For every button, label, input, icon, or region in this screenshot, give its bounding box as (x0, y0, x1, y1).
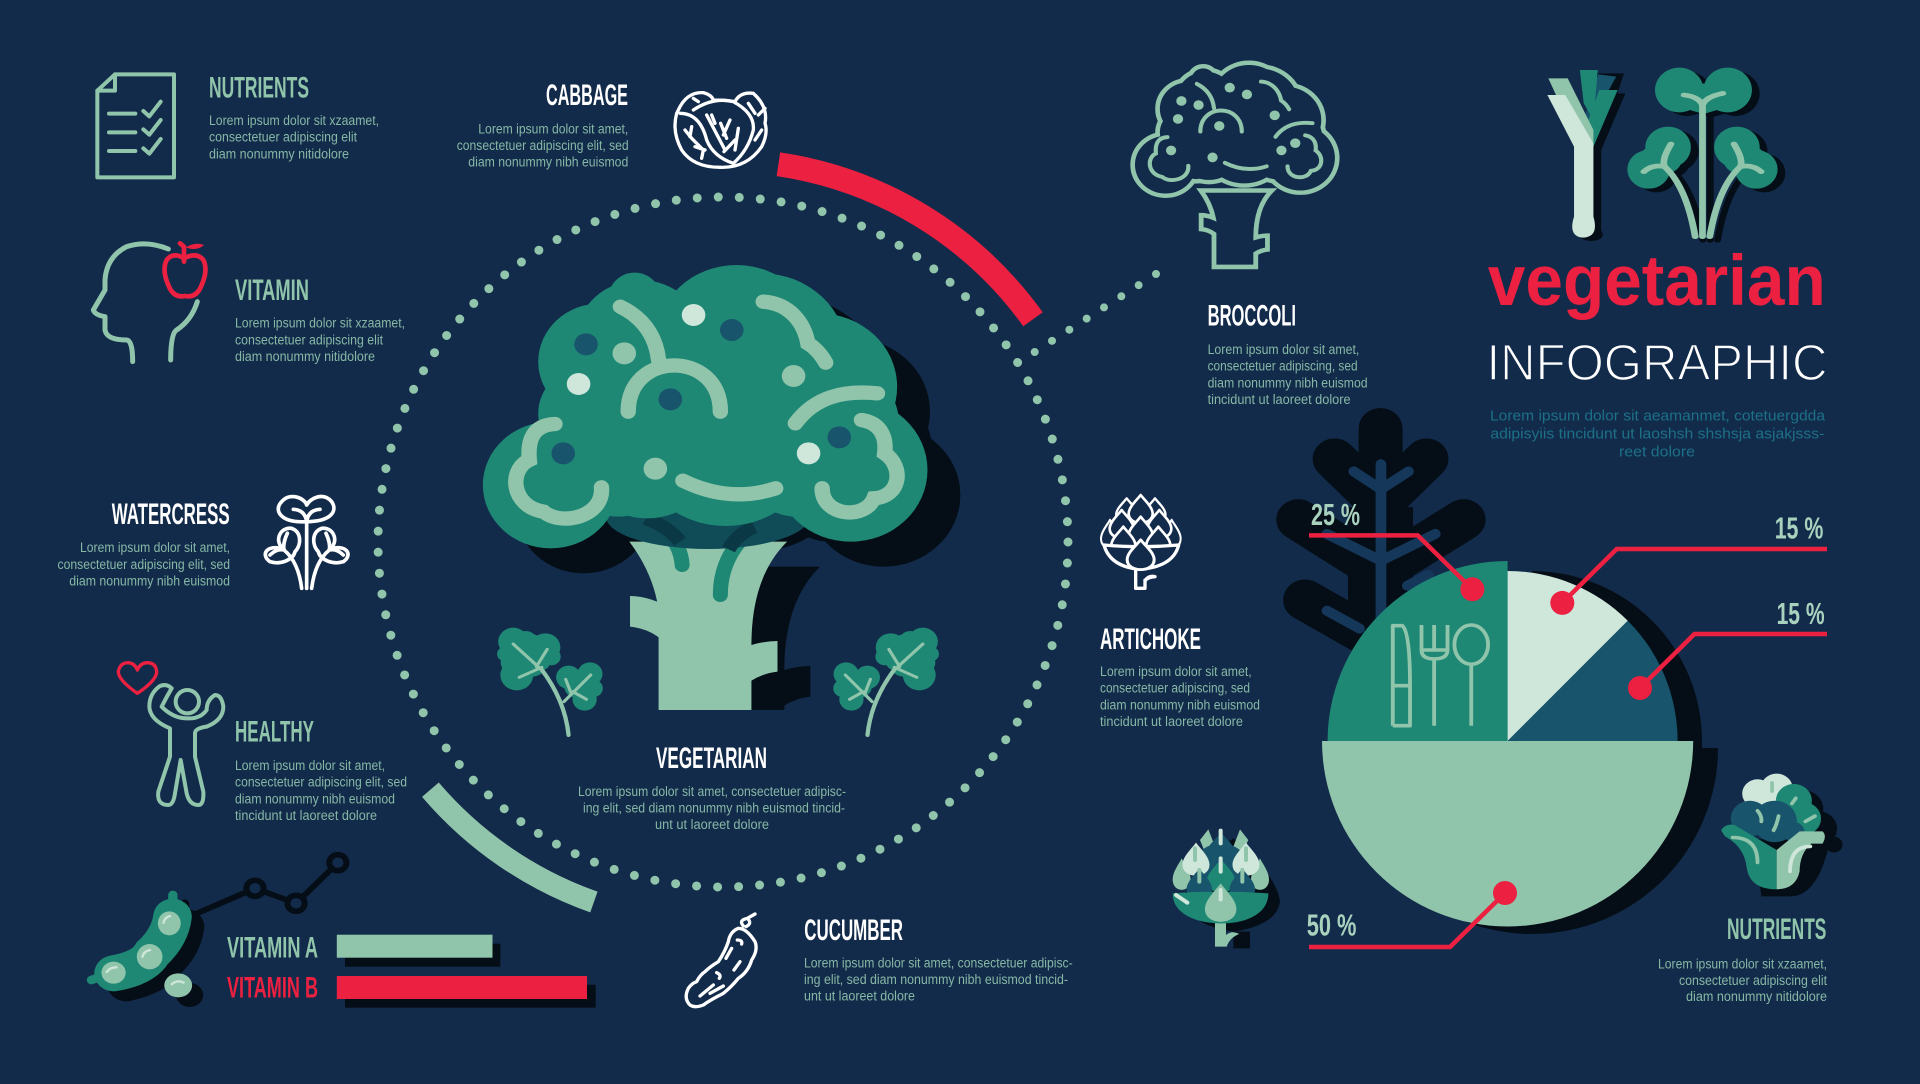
text: artichoke: diam nonummy nibh euismod (1100, 698, 1260, 713)
intro paragraph: Lorem ipsum dolor sit aeamanmet, cotetuergdda (1490, 408, 1826, 424)
black leaf behind pie (1298, 429, 1464, 643)
icon: healthy figure with heart (118, 663, 223, 805)
text: healthy: diam nonummy nibh euismod (235, 791, 395, 806)
text: cucumber (804, 956, 1073, 1004)
icon: colored watercress (1627, 68, 1785, 240)
text: watercress: diam nonummy nibh euismod (69, 574, 230, 588)
title: vegetarian (1488, 242, 1826, 321)
intro paragraph: adipisyiis tincidunt ut laoshsh shshsja asjakjsss- (1490, 426, 1824, 442)
text: vitamin: Lorem ipsum dolor sit xzaamet, (235, 316, 405, 331)
text: broccoli: Lorem ipsum dolor sit amet, (1208, 342, 1359, 357)
callout: 50 percent: 50 % (1307, 908, 1356, 943)
intro paragraph: reet dolore (1619, 444, 1695, 460)
callout: 15 percent lower: 15 % (1777, 596, 1825, 631)
text: vitamin: consectetuer adipiscing elit (235, 332, 383, 347)
heading: watercress: WATERCRESS (112, 498, 230, 531)
text: healthy: tincidunt ut laoreet dolore (235, 808, 377, 823)
icon: head with apple (93, 243, 205, 362)
text: broccoli: tincidunt ut laoreet dolore (1208, 392, 1351, 407)
text: cucumber: unt ut laoreet dolore (804, 988, 915, 1004)
heading: artichoke: ARTICHOKE (1100, 623, 1201, 656)
text: artichoke (1100, 664, 1260, 729)
intro paragraph (1490, 408, 1826, 460)
dotted circle (378, 197, 1068, 887)
text: cucumber: ing elit, sed diam nonummy nibh euismod tincid- (804, 972, 1068, 987)
icon: checklist (97, 74, 174, 177)
icon: colored artichoke (1173, 829, 1280, 948)
callout: 50 percent (1307, 881, 1517, 947)
subtitle: INFOGRAPHIC (1486, 334, 1828, 391)
heading: nutrients: NUTRIENTS (209, 71, 309, 104)
parsley right (833, 628, 939, 735)
heading: cabbage: CABBAGE (546, 79, 628, 112)
text: vitamin: diam nonummy nitidolore (235, 349, 375, 364)
text: cabbage: consectetuer adipiscing elit, sed (457, 138, 629, 153)
bar: vitamin b (337, 976, 596, 1008)
chart line (193, 855, 346, 915)
text: vegetarian (578, 784, 846, 832)
line chart and bean pod (91, 855, 346, 1007)
text: nutrients right: diam nonummy nitidolore (1686, 989, 1827, 1004)
callout: 25 percent: 25 % (1311, 497, 1360, 532)
text: vegetarian: Lorem ipsum dolor sit amet, consectetuer adipisc- (578, 784, 846, 799)
text: nutrients: Lorem ipsum dolor sit xzaamet, (209, 113, 379, 128)
text: artichoke: Lorem ipsum dolor sit amet, (1100, 664, 1252, 679)
text: healthy: consectetuer adipiscing elit, sed (235, 775, 407, 790)
green arc (430, 790, 594, 902)
text: watercress: consectetuer adipiscing elit, sed (58, 557, 230, 572)
callout: 15 percent top: 15 % (1775, 511, 1823, 546)
icon: cabbage outline (675, 93, 766, 167)
lettuce shadow (1754, 790, 1842, 896)
pie chart (1322, 561, 1718, 934)
text: vitamin (235, 316, 405, 364)
icon: cutlery (1393, 625, 1488, 726)
slice 15% dark (1508, 621, 1678, 741)
icon: watercress outline (265, 497, 348, 588)
text: cabbage: diam nonummy nibh euismod (468, 155, 628, 170)
text: broccoli: consectetuer adipiscing, sed (1208, 359, 1358, 374)
text: vegetarian: unt ut laoreet dolore (655, 817, 769, 832)
heading: vegetarian: VEGETARIAN (656, 742, 767, 775)
text: nutrients right (1658, 957, 1827, 1004)
red arc (778, 164, 1033, 319)
text: nutrients right: consectetuer adipiscing elit (1679, 973, 1827, 988)
pod shadow (126, 903, 203, 1007)
parsley left (497, 628, 603, 735)
label: vitamin a: VITAMIN A (227, 932, 318, 965)
peas (101, 911, 192, 997)
central broccoli illustration (483, 265, 960, 735)
text: broccoli (1208, 342, 1368, 407)
callout: 25 percent (1309, 497, 1484, 601)
broccoli body (483, 265, 927, 710)
text: cabbage (457, 121, 629, 170)
icon: colored leek (1547, 70, 1625, 241)
text: watercress (58, 540, 230, 588)
broccoli shadow (526, 306, 960, 710)
icon: cucumber outline (686, 914, 756, 1007)
heading: broccoli: BROCCOLI (1208, 300, 1296, 333)
slice 25% (1328, 561, 1508, 741)
text: artichoke: tincidunt ut laoreet dolore (1100, 714, 1243, 729)
text: cabbage: Lorem ipsum dolor sit amet, (478, 121, 628, 136)
text: broccoli: diam nonummy nibh euismod (1208, 375, 1368, 390)
dotted connector to broccoli (1035, 274, 1156, 352)
label: vitamin b: VITAMIN B (227, 971, 318, 1004)
text: nutrients (209, 113, 379, 161)
text: nutrients right: Lorem ipsum dolor sit xzaamet, (1658, 957, 1827, 972)
heading: vitamin: VITAMIN (235, 274, 309, 307)
heading: cucumber: CUCUMBER (804, 914, 903, 947)
text: artichoke: consectetuer adipiscing, sed (1100, 681, 1250, 696)
pod (91, 895, 173, 980)
icon: artichoke outline (1101, 495, 1181, 588)
heading: healthy: HEALTHY (235, 716, 314, 749)
icon: colored lettuce (1721, 774, 1842, 896)
bar: vitamin a (337, 935, 500, 967)
slice 15% pale (1508, 571, 1628, 741)
heading: nutrients right: NUTRIENTS (1727, 913, 1826, 946)
text: watercress: Lorem ipsum dolor sit amet, (80, 540, 230, 555)
text: healthy (235, 758, 407, 823)
text: nutrients: consectetuer adipiscing elit (209, 130, 357, 145)
slice 50% (1322, 741, 1693, 926)
text: cucumber: Lorem ipsum dolor sit amet, consectetuer adipisc- (804, 956, 1073, 971)
icon: broccoli outline (1135, 65, 1335, 267)
callout: 15 percent lower (1628, 596, 1827, 700)
callout: 15 percent top (1550, 511, 1827, 615)
pie shadow (1346, 571, 1718, 934)
text: vegetarian: ing elit, sed diam nonummy nibh euismod tincid- (583, 801, 845, 816)
text: healthy: Lorem ipsum dolor sit amet, (235, 758, 385, 773)
text: nutrients: diam nonummy nitidolore (209, 146, 349, 161)
